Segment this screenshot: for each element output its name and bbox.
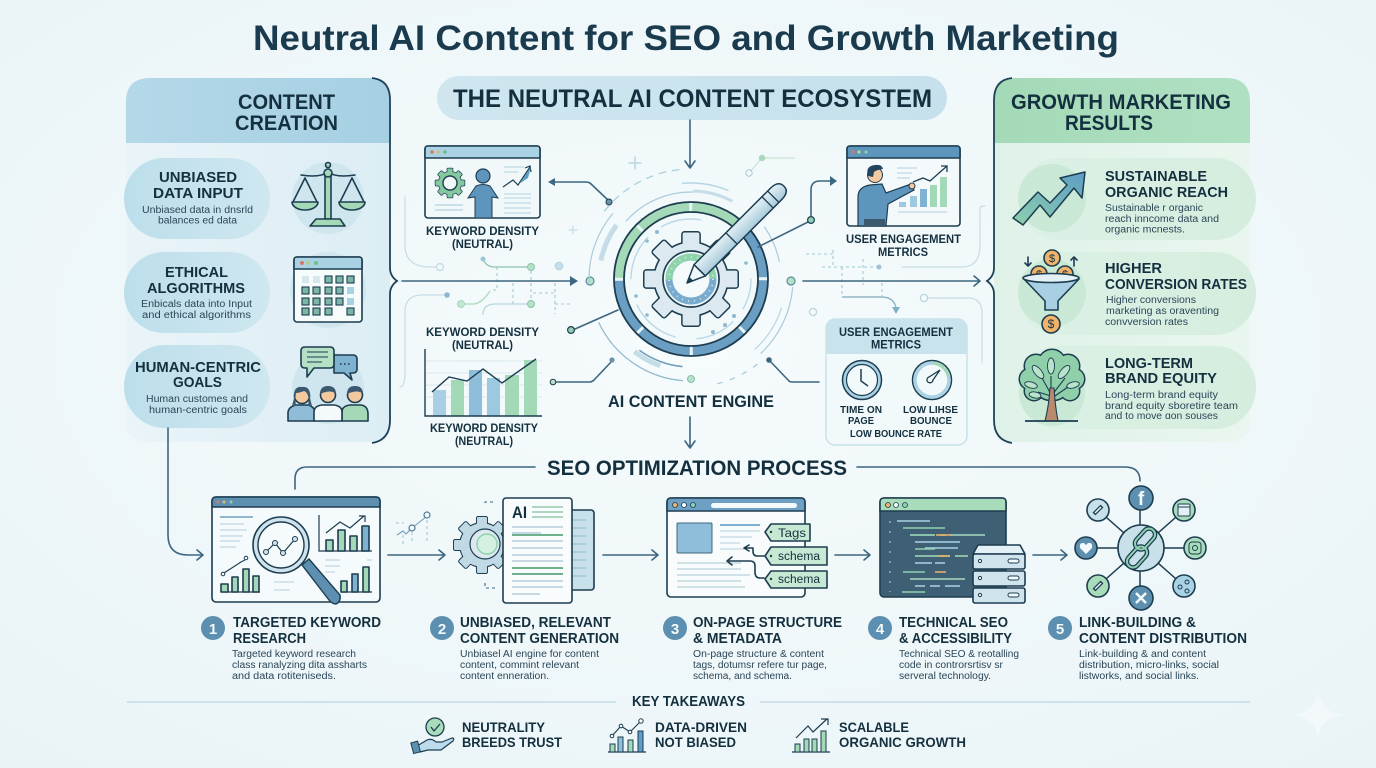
label: keyword density 1: KEYWORD DENSITY xyxy=(426,226,539,238)
connector: chart to engine xyxy=(550,310,618,385)
pill: human-centric goals: GOALS xyxy=(173,374,222,391)
label: keyword density 3: KEYWORD DENSITY xyxy=(430,423,538,435)
arrow: step 3 to 4 xyxy=(835,550,870,560)
label: keyword density 2: (NEUTRAL) xyxy=(452,340,513,352)
pill: ethical algorithms: ETHICAL xyxy=(165,264,228,281)
icon: gauge xyxy=(912,360,952,400)
pill: sustainable organic reach: reach inncome data and xyxy=(1105,214,1219,225)
circuit decoration: right xyxy=(746,155,985,363)
label: user engagement xyxy=(846,232,962,259)
heading: growth marketing results: RESULTS xyxy=(1065,112,1153,135)
pill: unbiased data input: UNBIASED xyxy=(159,169,237,186)
icon: funnel with coins: $ xyxy=(1049,253,1055,265)
step 5: link network graphic xyxy=(1075,486,1206,610)
arrow: step 2 to 3 xyxy=(603,550,658,560)
icon: data chart xyxy=(608,719,646,752)
pill: long-term brand equity: BRAND EQUITY xyxy=(1105,370,1217,387)
pill: ethical algorithms: and ethical algorithms xyxy=(142,310,251,321)
step 3: text: 3 xyxy=(671,621,679,638)
heading: key takeaways: KEY TAKEAWAYS xyxy=(632,694,745,710)
icon: server stack xyxy=(973,545,1025,603)
label: keyword density 1: (NEUTRAL) xyxy=(452,239,513,251)
arrow: engine to results xyxy=(787,276,980,286)
pill: higher conversion rates xyxy=(1018,252,1256,335)
icon: balance scales xyxy=(292,162,365,234)
icon: magnifying glass xyxy=(253,517,340,604)
pill: ethical algorithms xyxy=(124,252,270,333)
tag: tags: Tags xyxy=(778,526,806,540)
takeaway: neutrality breeds trust: BREEDS TRUST xyxy=(462,734,562,750)
decorative arcs around engine xyxy=(537,125,845,433)
pill: higher conversion rates: convversion rates xyxy=(1105,317,1188,328)
heading: content creation: CONTENT xyxy=(238,91,335,114)
pill: long-term brand equity: and to move ɑon souses xyxy=(1105,411,1218,422)
icon: tree xyxy=(1020,350,1084,421)
pill: unbiased data input xyxy=(124,158,270,239)
icon: people with chat bubbles xyxy=(288,347,368,424)
step 2: AI document graphic xyxy=(454,498,594,603)
step 5: text: LINK-BUILDING & xyxy=(1079,615,1196,631)
step 5: text: 5 xyxy=(1056,621,1064,638)
panel: content creation xyxy=(124,78,397,443)
label: keyword density 3 xyxy=(430,423,538,448)
icon: funnel with coins: $ xyxy=(1048,317,1055,331)
step 5: text: distribution, micro-links, social xyxy=(1079,660,1219,671)
step 5: text: Link-building & and content xyxy=(1079,649,1206,660)
segmented outer ring xyxy=(589,177,793,381)
pill: human-centric goals: HUMAN-CENTRIC xyxy=(135,359,261,376)
heading pill: ecosystem xyxy=(437,76,947,120)
icon: clock xyxy=(842,360,882,400)
step 4: technical seo graphic xyxy=(880,498,1025,603)
pill: sustainable organic reach: SUSTAINABLE xyxy=(1105,168,1207,185)
icon: person xyxy=(468,169,498,218)
heading pill: ecosystem: THE NEUTRAL AI CONTENT ECOSYSTEM xyxy=(453,85,932,113)
icon: growth arrow xyxy=(1013,172,1085,225)
step 2: AI document graphic: AI xyxy=(512,503,527,522)
heading: growth marketing results xyxy=(1011,91,1231,135)
step 3: text: & METADATA xyxy=(693,631,783,647)
icon: chain link xyxy=(1125,526,1157,570)
step 5: text: listworks, and social links. xyxy=(1079,671,1199,682)
tag: schema 1: schema xyxy=(778,551,821,563)
circuit decoration: left xyxy=(400,157,641,387)
pill: ethical algorithms: Enbicals data into Input xyxy=(141,299,252,310)
step 3: text: tags, dotumsr refere tur page, xyxy=(693,660,827,671)
step 2: text xyxy=(430,615,619,682)
pill: long-term brand equity: LONG-TERM xyxy=(1105,355,1193,372)
pill: human-centric goals: human-centric goals xyxy=(149,405,247,416)
pill: unbiased data input: balances ed data xyxy=(158,216,237,226)
heading: seo optimization process xyxy=(295,457,1140,489)
icon: funnel with coins: $ xyxy=(1036,269,1042,281)
takeaway: neutrality breeds trust xyxy=(411,718,562,754)
step 2: text: CONTENT GENERATION xyxy=(460,631,619,647)
step 2: text: UNBIASED, RELEVANT xyxy=(460,615,611,631)
pill: higher conversion rates: marketing as oraventing xyxy=(1106,306,1219,317)
takeaway: data-driven not biased: DATA-DRIVEN xyxy=(655,719,747,735)
tag: schema 1 xyxy=(765,547,827,565)
pill: human-centric goals: Human customes and xyxy=(146,394,248,405)
arrow: engine to keyword window xyxy=(548,178,612,205)
connector: content creation to seo process xyxy=(168,428,203,560)
step 1: text: and data rotiteniseds. xyxy=(232,671,336,682)
arrow: ecosystem to engine xyxy=(685,120,695,168)
heading: content creation xyxy=(235,91,338,135)
label: keyword density 2: KEYWORD DENSITY xyxy=(426,327,539,339)
pill: human-centric goals xyxy=(124,345,270,428)
bar chart: keyword density xyxy=(425,349,542,416)
step 4: text: 4 xyxy=(876,621,885,638)
panel: user engagement metrics card: LOW LIHSE xyxy=(903,404,958,416)
step 3: text: On-page structure & content xyxy=(693,649,824,660)
panel: user engagement metrics card: TIME ON xyxy=(840,404,882,416)
panel: user engagement metrics card: USER ENGAGEMENT xyxy=(839,325,954,339)
pill: long-term brand equity: brand equity sboretire team xyxy=(1105,401,1238,412)
heading: growth marketing results: GROWTH MARKETING xyxy=(1011,91,1231,114)
step 1: keyword research graphic xyxy=(212,497,380,604)
icon: hand with check xyxy=(411,718,454,754)
step 1: text: RESEARCH xyxy=(233,631,306,647)
takeaway: scalable organic growth: SCALABLE xyxy=(839,719,909,735)
tag: schema 2 xyxy=(765,571,827,588)
step 5: link network graphic: f xyxy=(1138,489,1145,510)
step 5: text: CONTENT DISTRIBUTION xyxy=(1079,631,1247,647)
icon: sparkle watermark xyxy=(1294,692,1342,738)
pill: unbiased data input: Unbiased data in dnsrld xyxy=(142,205,253,216)
panel: growth marketing results xyxy=(987,78,1256,443)
pill: sustainable organic reach: Sustainable r organic xyxy=(1105,203,1203,214)
step 3: text: ON-PAGE STRUCTURE xyxy=(693,615,842,631)
panel: user engagement window xyxy=(847,146,960,226)
step 1: text: class ranalyzing dita assharts xyxy=(232,660,367,671)
takeaway: data-driven not biased xyxy=(608,719,747,752)
icon: presenter xyxy=(858,165,915,226)
pill: higher conversion rates: Higher conversions xyxy=(1106,295,1196,306)
arrow: step 1 to 2 xyxy=(388,512,445,560)
step 4: text xyxy=(868,615,1019,682)
label: keyword density 2 xyxy=(426,327,539,352)
icon: green gear xyxy=(436,168,464,198)
panel: user engagement metrics card: PAGE xyxy=(848,415,874,427)
panel: user engagement metrics card: LOW BOUNCE RATE xyxy=(850,428,942,440)
title: Neutral AI Content for SEO and Growth Marketing xyxy=(253,19,1119,58)
connector: engine to metrics card xyxy=(766,357,819,382)
tag: tags xyxy=(765,524,810,541)
central engine xyxy=(537,125,845,433)
pill: long-term brand equity: Long-term brand equity xyxy=(1105,390,1218,401)
pill: long-term brand equity xyxy=(1018,346,1256,429)
step 4: text: & ACCESSIBILITY xyxy=(899,631,1012,647)
takeaway: data-driven not biased: NOT BIASED xyxy=(655,734,736,750)
gear xyxy=(644,232,738,326)
step 1: text: TARGETED KEYWORD xyxy=(233,615,381,631)
step 3: on-page structure graphic xyxy=(667,498,827,597)
heading: seo optimization process: SEO OPTIMIZATION PROCESS xyxy=(547,457,847,480)
icon: growth chart xyxy=(792,719,830,752)
icon: calendar grid window xyxy=(290,252,366,328)
step 2: text: 2 xyxy=(438,621,446,638)
step 5: text xyxy=(1048,615,1247,682)
label: keyword density 3: (NEUTRAL) xyxy=(455,436,513,448)
takeaway: scalable organic growth xyxy=(792,719,966,752)
icon: funnel with coins xyxy=(1023,250,1079,333)
label: user engagement: METRICS xyxy=(878,245,928,259)
icon: gear xyxy=(454,517,510,573)
takeaway: scalable organic growth: ORGANIC GROWTH xyxy=(839,734,966,750)
panel: user engagement metrics card: METRICS xyxy=(871,338,921,352)
step 4: text: Technical SEO & reotalling xyxy=(899,649,1019,660)
step 3: text xyxy=(663,615,842,682)
tag: schema 2: schema xyxy=(778,574,821,586)
pill: sustainable organic reach xyxy=(1018,158,1256,240)
step 1: text xyxy=(201,615,381,682)
pill: unbiased data input: DATA INPUT xyxy=(153,185,243,202)
icon: pen xyxy=(681,180,790,289)
step 3: text: schema, and schema. xyxy=(693,671,792,682)
label: keyword density 1 xyxy=(426,226,539,251)
arrow: step 4 to 5 xyxy=(1033,550,1067,560)
step 2: text: content enneration. xyxy=(460,671,549,682)
step 4: text: code in controrsrtisv sr xyxy=(899,660,1004,671)
arrow: engine to seo process xyxy=(685,417,695,448)
label: ai content engine: AI CONTENT ENGINE xyxy=(608,393,774,411)
step 4: text: serveral technology. xyxy=(899,671,991,682)
pill: higher conversion rates: CONVERSION RATES xyxy=(1105,276,1247,293)
step 1: text: Targeted keyword research xyxy=(232,649,356,660)
takeaway: neutrality breeds trust: NEUTRALITY xyxy=(462,719,546,735)
connector: engine to engagement window xyxy=(758,176,837,247)
label: user engagement: USER ENGAGEMENT xyxy=(846,232,962,246)
step 1: text: 1 xyxy=(209,621,217,638)
pill: sustainable organic reach: ORGANIC REACH xyxy=(1105,184,1228,201)
pill: sustainable organic reach: organic mcnests. xyxy=(1105,224,1185,236)
panel: keyword density window xyxy=(425,146,540,218)
icon: funnel with coins: $ xyxy=(1062,269,1068,281)
step 4: text: TECHNICAL SEO xyxy=(899,615,1008,631)
step 2: text: Unbiasel AI engine for content xyxy=(460,649,599,660)
panel: user engagement metrics card: BOUNCE xyxy=(910,415,952,427)
pill: ethical algorithms: ALGORITHMS xyxy=(147,280,245,297)
heading: content creation: CREATION xyxy=(235,112,338,135)
step 2: text: content, commint relevant xyxy=(460,660,579,671)
arrow: main content flow xyxy=(402,276,594,286)
pill: higher conversion rates: HIGHER xyxy=(1105,260,1162,277)
panel: user engagement metrics card xyxy=(826,319,967,445)
